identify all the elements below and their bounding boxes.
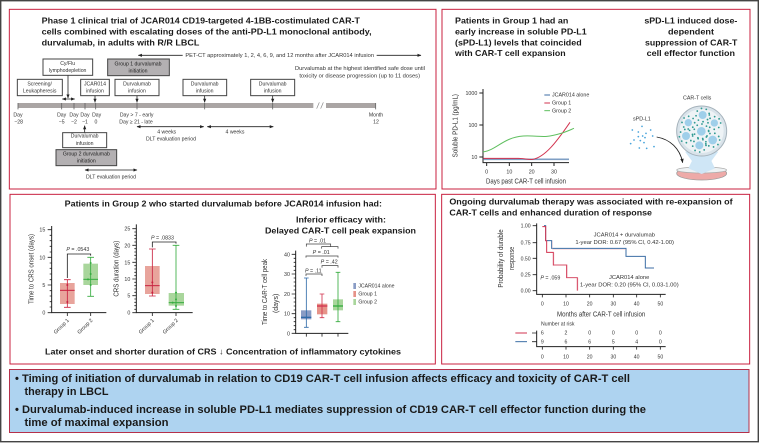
number at risk table: 5 — [612, 339, 615, 345]
box: screening: Screening/ — [27, 81, 53, 87]
significance brackets: P = .01 — [309, 238, 326, 244]
Kaplan-Meier chart: P = .059 — [540, 275, 560, 281]
significance brackets: P = .42 — [321, 260, 338, 266]
key point 2: time of maximal expansion — [24, 417, 169, 429]
box plot: time to CAR-T cell peak: 0 — [287, 331, 290, 337]
number at risk table: 0 — [541, 354, 544, 360]
heading: sPD-L1 increase: with CAR-T cell expansion — [454, 48, 566, 58]
number at risk table: 0 — [612, 331, 615, 337]
Kaplan-Meier chart: 20 — [587, 302, 593, 308]
Kaplan-Meier chart: Probability of durable — [498, 229, 505, 288]
box: group 1 initiation: Group 1 durvalumab — [114, 61, 162, 67]
heading: dose-dependent suppression: sPD-L1 induced dose- — [644, 16, 738, 26]
box: durvalumab infusion 3 — [251, 79, 295, 96]
Kaplan-Meier chart: 0 — [541, 302, 544, 308]
line chart: soluble PD-L1: 20 — [529, 169, 535, 175]
arrow: sPD-L1 to dish — [657, 137, 683, 163]
day labels: Day — [13, 112, 23, 118]
box: durvalumab infusion 1: Durvalumab — [123, 81, 151, 87]
annotation: JCAR014 alone arm — [580, 275, 679, 288]
PET-CT timing arrow: PET-CT approximately 1, 2, 4, 6, 9, and 12 months after JCAR014 infusion — [185, 53, 374, 59]
heading: group 2: Patients in Group 2 who started durvalumab before JCAR014 infusion had: — [65, 198, 382, 208]
box plot: CRS duration — [113, 224, 193, 336]
box plot: time to CRS onset: 10 — [39, 255, 45, 261]
box plot: CRS duration: 25 — [124, 227, 130, 233]
heading: trial design: durvalumab, in adults with R/R LBCL — [42, 38, 199, 48]
panel: group 2 CRS outcomes — [10, 194, 435, 364]
Kaplan-Meier chart — [498, 223, 666, 319]
heading: sPD-L1 increase: Patients in Group 1 had an — [455, 16, 568, 26]
conclusion: CRS: Later onset and shorter duration of CRS ↓ Concentration of inflammatory cytokines — [45, 347, 401, 357]
box plot: time to CRS onset: Group 1 — [53, 318, 71, 336]
annotation: durvalumab arm: 1-year DOR: 0.67 (95% CI, 0.42-1.00) — [575, 240, 674, 246]
box plot legend: Group 1 — [358, 292, 377, 298]
Kaplan-Meier chart: 0.25 — [521, 272, 531, 278]
line chart: soluble PD-L1: 10 — [471, 155, 477, 161]
interval arrows and labels: 4 weeks — [157, 130, 177, 136]
heading: inferior efficacy — [265, 215, 416, 235]
box plot legend: JCAR014 alone — [358, 284, 395, 290]
illustration: sPD-L1 molecules: sPD-L1 — [633, 117, 651, 123]
illustration: CAR-T cell dish — [677, 95, 727, 180]
box plot: time to CAR-T cell peak: 20 — [284, 292, 290, 298]
box: group 1 initiation: initiation — [129, 68, 148, 74]
interval arrows and labels: 4 weeks — [226, 130, 245, 136]
box plot: time to CRS onset: 5 — [42, 283, 45, 289]
illustration: CAR-T cell dish: CAR-T cells — [683, 95, 712, 101]
heading: dose-dependent suppression: dependent — [668, 27, 714, 37]
box plot: time to CAR-T cell peak: 30 — [284, 272, 290, 278]
box: lymphodepletion — [43, 59, 93, 75]
number at risk table: 50 — [657, 354, 663, 360]
Kaplan-Meier chart: 1.00 — [521, 224, 531, 230]
Kaplan-Meier chart: response — [509, 247, 516, 270]
heading: dose-dependent suppression: suppression of CAR-T — [645, 37, 738, 47]
line chart: soluble PD-L1: Soluble PD-L1 (pg/mL) — [453, 94, 460, 157]
number at risk table: 9 — [541, 339, 544, 345]
box: JCAR014 infusion: JCAR014 — [84, 81, 106, 87]
number at risk table: 30 — [610, 354, 616, 360]
box: lymphodepletion: lymphodepletion — [49, 68, 87, 74]
day labels: −5 — [59, 120, 65, 126]
day labels — [13, 112, 383, 126]
panel: trial design — [9, 9, 436, 189]
heading: dose-dependent suppression — [644, 16, 738, 58]
DLT evaluation period, group 2: DLT evaluation period — [86, 174, 136, 180]
box: durvalumab infusion 3: infusion — [264, 88, 282, 94]
line chart: soluble PD-L1: 10 — [506, 169, 512, 175]
number at risk table: 40 — [634, 354, 640, 360]
panel: soluble PD-L1 — [442, 9, 750, 189]
chart legend: JCAR014 alone — [552, 93, 589, 99]
heading: trial design — [42, 16, 372, 48]
key point 1 — [15, 373, 630, 398]
number at risk table: 0 — [635, 331, 638, 337]
box plot: CRS duration: CRS duration (days) — [113, 241, 120, 297]
number at risk table: 6 — [565, 339, 568, 345]
key point 1: • Timing of initiation of durvalumab in relation to CD19 CAR-T cell infusion affects efficacy and toxicity of CAR-T cell — [15, 373, 630, 385]
heading: sPD-L1 increase: (sPD-L1) levels that coincided — [455, 37, 582, 47]
chart legend: Group 2 — [552, 108, 571, 114]
number at risk table: 0 — [659, 339, 662, 345]
day labels: Day — [92, 112, 102, 118]
box: group 1 initiation — [108, 59, 169, 76]
box: screening — [17, 79, 62, 96]
chart legend — [544, 93, 589, 114]
line chart: soluble PD-L1: Days past CAR-T cell infusion — [486, 179, 566, 186]
box plot legend — [353, 283, 395, 306]
panel: key points — [10, 370, 749, 432]
number at risk table — [515, 322, 666, 360]
day labels: Day — [80, 112, 90, 118]
box plot: time to CAR-T cell peak — [262, 251, 348, 337]
box: durvalumab infusion before CAR-T — [63, 133, 107, 148]
number at risk table: Number at risk — [541, 322, 575, 328]
Kaplan-Meier chart: 0.00 — [521, 288, 531, 294]
box: durvalumab infusion 2 — [183, 79, 227, 96]
box: durvalumab infusion 1 — [115, 79, 159, 96]
heading: dose-dependent suppression: cell effector function — [647, 48, 735, 58]
box plot legend: Group 2 — [358, 300, 377, 306]
box: group 2 initiation — [56, 150, 117, 166]
timeline bar — [18, 102, 376, 109]
heading: inferior efficacy: Inferior efficacy with: — [296, 215, 386, 225]
day labels: Day ≥ 21 - late — [119, 120, 153, 126]
panel: duration of response — [442, 194, 750, 364]
key point 2: • Durvalumab-induced increase in soluble PD-L1 mediates suppression of CD19 CAR-T cell effector function during the — [15, 404, 646, 416]
box plot: CRS duration: Group 2 — [162, 318, 180, 336]
day labels: 12 — [373, 120, 379, 126]
line chart: soluble PD-L1: 0 — [485, 169, 488, 175]
heading: inferior efficacy: Delayed CAR-T cell peak expansion — [265, 225, 416, 235]
significance brackets: P = .01 — [313, 250, 330, 256]
annotation: durvalumab arm — [575, 233, 674, 246]
illustration: sPD-L1 molecules — [630, 117, 655, 149]
box plot: time to CAR-T cell peak: 40 — [284, 252, 290, 258]
day labels: Day — [69, 112, 79, 118]
number at risk table: 20 — [587, 354, 593, 360]
annotation: durvalumab arm: JCAR014 + durvalumab — [594, 233, 655, 239]
box plot: time to CRS onset: 15 — [39, 228, 45, 234]
line chart: soluble PD-L1: 1000 — [465, 91, 477, 97]
box plot: CRS duration: 15 — [124, 260, 130, 266]
box plot: CRS duration: 0 — [127, 311, 130, 317]
significance brackets — [305, 238, 338, 276]
box: durvalumab infusion 3: Durvalumab — [259, 81, 287, 87]
heading: durable response — [449, 197, 733, 217]
number at risk table: 0 — [659, 331, 662, 337]
Kaplan-Meier chart: 50 — [657, 302, 663, 308]
day labels: −1 — [82, 120, 88, 126]
number at risk table: 6 — [588, 339, 591, 345]
box: durvalumab infusion 2: Durvalumab — [191, 81, 219, 87]
box plot: time to CAR-T cell peak: 10 — [284, 312, 290, 318]
annotation: JCAR014 alone arm: 1-year DOR: 0.20 (95% CI, 0.03-1.00) — [580, 282, 679, 288]
note: durvalumab dosing: toxicity or disease progression (up to 11 doses) — [299, 73, 420, 79]
Kaplan-Meier chart: 30 — [610, 302, 616, 308]
interval arrows and labels: DLT evaluation period — [146, 137, 196, 143]
box: group 2 initiation: Group 2 durvalumab — [63, 151, 110, 157]
box plot: time to CRS onset: Time to CRS onset (days) — [28, 234, 35, 304]
heading: durable response: Ongoing durvalumab therapy was associated with re-expansion of — [449, 197, 733, 207]
day labels: Day — [57, 112, 67, 118]
note: durvalumab dosing: Durvalumab at the highest identified safe dose until — [295, 66, 425, 72]
box plot: CRS duration: 10 — [124, 277, 130, 283]
box: JCAR014 infusion — [81, 79, 109, 96]
box: group 2 initiation: initiation — [77, 159, 96, 165]
day labels: Day > 7 - early — [120, 112, 154, 118]
Kaplan-Meier chart: 40 — [634, 302, 640, 308]
Kaplan-Meier chart: 0.75 — [521, 240, 531, 246]
Kaplan-Meier chart: 10 — [563, 302, 569, 308]
box plot: time to CAR-T cell peak: (days) — [273, 294, 280, 313]
box: JCAR014 infusion: infusion — [86, 88, 104, 94]
line chart: soluble PD-L1 — [453, 89, 574, 186]
timeline arrows — [62, 75, 273, 133]
box: durvalumab infusion before CAR-T: Durvalumab — [71, 134, 99, 140]
heading: trial design: Phase 1 clinical trial of JCAR014 CD19-targeted 4-1BB-costimulated CAR-T — [42, 16, 361, 26]
day labels: −2 — [71, 120, 77, 126]
box plot: CRS duration: 5 — [127, 294, 130, 300]
box plot: time to CRS onset: P = .0543 — [66, 247, 89, 253]
key point 1: therapy in LBCL — [24, 386, 109, 398]
number at risk table: 2 — [565, 331, 568, 337]
number at risk table: 0 — [588, 331, 591, 337]
box plot: time to CRS onset: Group 2 — [77, 318, 94, 336]
box: durvalumab infusion before CAR-T: infusion — [76, 141, 94, 147]
heading: durable response: CAR-T cells and enhanced duration of response — [449, 207, 652, 217]
day labels: 0 — [95, 120, 98, 126]
annotation: JCAR014 alone arm: JCAR014 alone — [609, 275, 649, 281]
DLT evaluation period, group 2 — [85, 170, 137, 180]
box: durvalumab infusion 2: infusion — [196, 88, 214, 94]
note: durvalumab dosing — [295, 66, 425, 79]
number at risk table: 4 — [635, 339, 638, 345]
number at risk table: 6 — [541, 331, 544, 337]
line chart: soluble PD-L1: 100 — [468, 123, 477, 129]
chart legend: Group 1 — [552, 101, 571, 107]
box: lymphodepletion: Cy/Flu — [60, 61, 75, 67]
box: durvalumab infusion 1: infusion — [128, 88, 146, 94]
box plot: CRS duration: P = .0833 — [151, 235, 174, 241]
box: screening: Leukapheresis — [23, 88, 57, 94]
heading: trial design: cells combined with escalating doses of the anti-PD-L1 monoclonal antibody, — [42, 27, 372, 37]
box plot: CRS duration: Group 1 — [138, 318, 156, 336]
key point 2 — [15, 404, 646, 429]
number at risk table: 10 — [563, 354, 569, 360]
box plot: time to CRS onset — [28, 226, 106, 336]
box plot: time to CRS onset: 0 — [42, 311, 45, 317]
interval arrows and labels — [137, 127, 273, 143]
panel: CAR-T peak expansion chart — [262, 215, 416, 337]
significance brackets: P = .11 — [305, 268, 322, 274]
Kaplan-Meier chart: Months after CAR-T cell infusion — [557, 312, 645, 319]
box plot: CRS duration: 20 — [124, 243, 130, 249]
heading: sPD-L1 increase: early increase in soluble PD-L1 — [455, 27, 587, 37]
heading: sPD-L1 increase — [454, 16, 587, 58]
box plot: time to CAR-T cell peak: Time to CAR-T cell peak — [262, 259, 269, 325]
day labels: Month — [369, 112, 383, 118]
day labels: −28 — [14, 120, 23, 126]
line chart: soluble PD-L1: 30 — [551, 169, 557, 175]
Kaplan-Meier chart: 0.50 — [521, 256, 531, 262]
